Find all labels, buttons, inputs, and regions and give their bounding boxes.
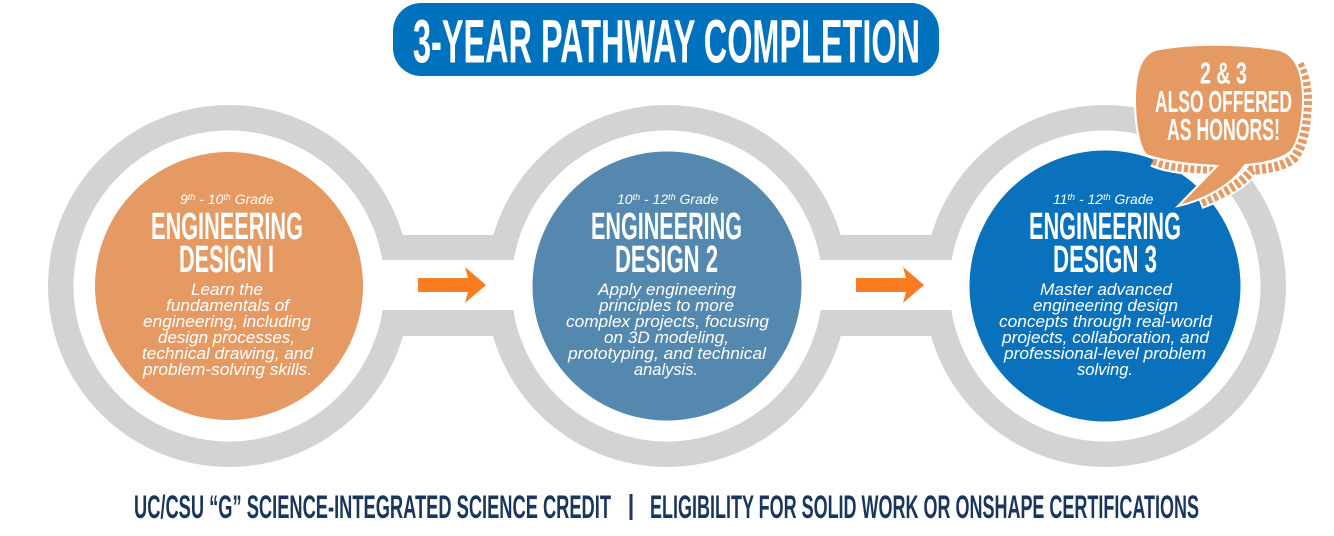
course description bbox=[142, 281, 314, 379]
callout: honors speech bubble: 2 & 3 bbox=[1200, 56, 1247, 90]
grade label: 9 bbox=[180, 191, 188, 207]
course description: principles to more bbox=[598, 297, 734, 315]
grade label: 11 bbox=[1053, 191, 1068, 207]
course heading bbox=[151, 206, 303, 281]
course description: Learn the bbox=[191, 281, 263, 299]
panel: Engineering Design I bbox=[95, 152, 363, 420]
course description: projects, collaboration, and bbox=[1001, 329, 1210, 347]
grade label: th bbox=[1103, 192, 1111, 202]
grade label: - 10 bbox=[195, 191, 224, 207]
course heading: ENGINEERING bbox=[591, 206, 742, 248]
grade label: - 12 bbox=[640, 191, 668, 207]
grade label: th bbox=[1068, 192, 1075, 202]
course description: problem-solving skills. bbox=[142, 361, 312, 379]
gray ring track connecting the courses bbox=[48, 105, 1286, 467]
grade label: th bbox=[188, 192, 195, 202]
grade label: th bbox=[223, 192, 231, 202]
course description: concepts through real-world bbox=[999, 313, 1213, 331]
grade label: Grade bbox=[231, 191, 274, 207]
grade label: Grade bbox=[676, 191, 719, 207]
title banner bbox=[393, 3, 939, 76]
course description: technical drawing, and bbox=[142, 345, 314, 363]
course description: design processes, bbox=[158, 329, 295, 347]
grade label: - 12 bbox=[1075, 191, 1103, 207]
course description: engineering, including bbox=[143, 313, 312, 331]
course description: engineering design bbox=[1033, 297, 1178, 315]
grade label: th bbox=[668, 192, 676, 202]
course description: complex projects, focusing bbox=[566, 313, 770, 331]
panel: Engineering Design 2 bbox=[532, 152, 802, 420]
course description: analysis. bbox=[634, 361, 698, 379]
course heading: ENGINEERING bbox=[151, 206, 303, 248]
course heading bbox=[591, 206, 742, 281]
grade label: 10 bbox=[617, 191, 633, 207]
course heading: DESIGN I bbox=[179, 239, 274, 281]
grade label: Grade bbox=[1111, 191, 1154, 207]
course description: on 3D modeling, bbox=[604, 329, 729, 347]
arrow: course 1 to course 2 bbox=[418, 267, 486, 303]
course description: prototyping, and technical bbox=[567, 345, 767, 363]
course heading: DESIGN 2 bbox=[615, 239, 718, 281]
course description: Apply engineering bbox=[597, 281, 737, 299]
course description bbox=[999, 281, 1213, 379]
course heading bbox=[1029, 206, 1181, 281]
callout: honors speech bubble bbox=[1135, 45, 1307, 206]
course description bbox=[566, 281, 770, 379]
arrow: course 2 to course 3 bbox=[856, 267, 924, 303]
course description: professional-level problem bbox=[1003, 345, 1206, 363]
grade label: th bbox=[633, 192, 640, 202]
course heading: ENGINEERING bbox=[1029, 206, 1181, 248]
course description: fundamentals of bbox=[166, 297, 292, 315]
footer credits line: UC/CSU “G” SCIENCE-INTEGRATED SCIENCE CREDIT bbox=[134, 489, 611, 525]
panel: Engineering Design 3 bbox=[970, 150, 1240, 422]
course description: solving. bbox=[1077, 361, 1133, 379]
course heading: DESIGN 3 bbox=[1053, 239, 1157, 281]
course description: Master advanced bbox=[1040, 281, 1173, 299]
